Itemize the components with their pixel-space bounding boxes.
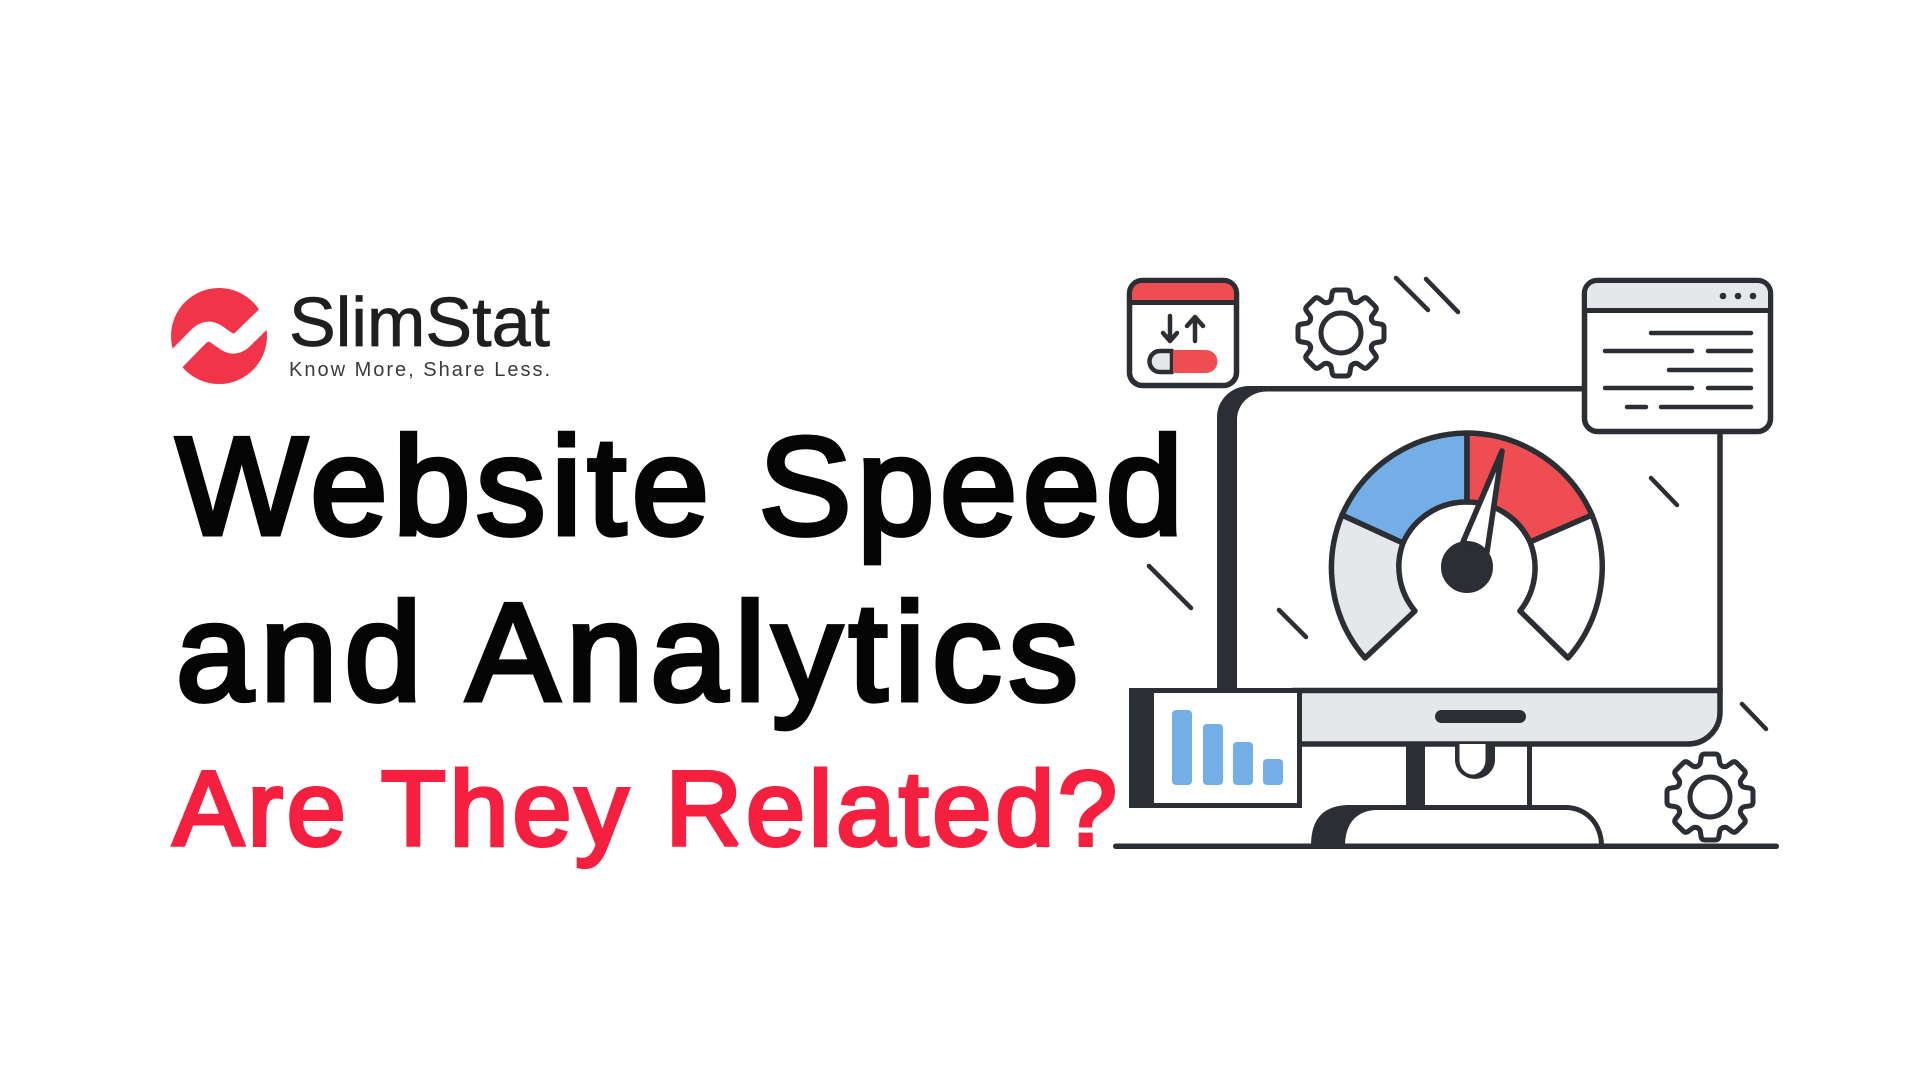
gauge white segment — [1520, 515, 1602, 658]
icon: gear top — [1298, 290, 1384, 376]
gauge needle — [1463, 451, 1502, 552]
gauge red segment — [1467, 433, 1592, 542]
ground line — [1113, 844, 1779, 849]
title — [176, 409, 1183, 730]
monitor chin — [1295, 690, 1720, 744]
monitor stand — [1406, 744, 1532, 807]
gauge — [1331, 433, 1602, 658]
icon: logo mark — [155, 288, 285, 384]
gauge blue segment — [1342, 433, 1467, 543]
monitor base — [1311, 805, 1604, 846]
title: Website Speed — [176, 409, 1183, 564]
logo: SlimStat — [155, 283, 550, 384]
monitor screen frame — [1217, 386, 1720, 692]
gauge grey segment — [1331, 515, 1415, 658]
bar chart card — [1129, 688, 1302, 808]
calendar transfer widget — [1130, 280, 1236, 386]
logo tagline: Know More, Share Less. — [289, 359, 550, 381]
title: and Analytics — [176, 575, 1078, 730]
browser window card — [1584, 280, 1772, 432]
illustration: monitor with speed gauge — [1113, 278, 1779, 849]
motion ticks — [1149, 278, 1766, 729]
logo wordmark: SlimStat — [289, 283, 550, 361]
icon: gear bottom — [1667, 754, 1753, 840]
gauge hub — [1443, 543, 1491, 591]
subtitle: Are They Related? — [173, 750, 1117, 868]
